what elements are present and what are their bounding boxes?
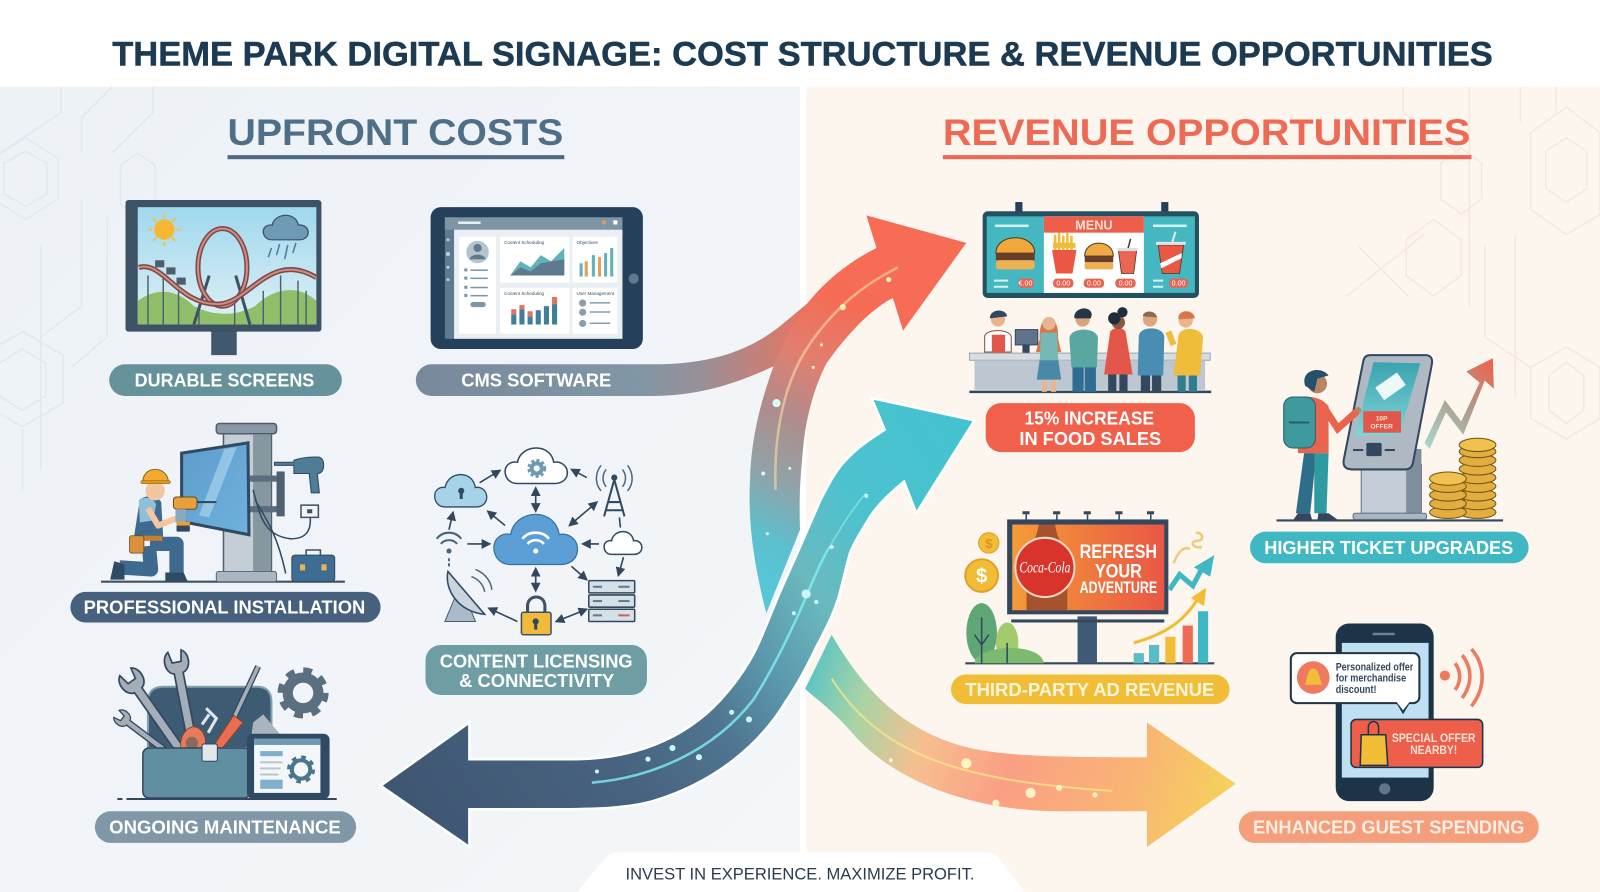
- label: professional installation: PROFESSIONAL INSTALLATION: [84, 596, 365, 617]
- card: content licensing and connectivity: [426, 448, 647, 695]
- icon: phone with personalized offer notifications: SPECIAL OFFER: [1392, 732, 1476, 745]
- icon: phone with personalized offer notifications: for merchandise: [1336, 673, 1406, 685]
- icon: roadside billboard with ad and rising bars: $: [985, 536, 993, 551]
- icon: digital menu board: 0.00: [1119, 280, 1132, 288]
- card: third-party ad revenue: [951, 511, 1230, 704]
- label: 15% increase in food sales: 15% INCREASE: [1024, 408, 1154, 429]
- footer tab: tagline: [577, 852, 1026, 892]
- footer tab: tagline: INVEST IN EXPERIENCE. MAXIMIZE PROFIT.: [626, 866, 974, 884]
- icon: digital menu board: 0.00: [1056, 280, 1070, 288]
- label: 15% increase in food sales: [986, 403, 1195, 452]
- label: content licensing and connectivity: CONTENT LICENSING: [440, 650, 633, 671]
- icon: cloud connectivity network: [435, 448, 642, 635]
- icon: roadside billboard with ad and rising bars: ADVENTURE: [1080, 579, 1157, 597]
- card: ongoing maintenance: [95, 649, 356, 843]
- icon: guest at ticket kiosk with coins and growth arrow: 10P: [1376, 415, 1388, 422]
- card: professional installation: [70, 423, 381, 622]
- heading: revenue opportunities: REVENUE OPPORTUNITIES: [943, 112, 1470, 153]
- icon: CMS dashboard tablet: User Management: [577, 291, 615, 296]
- icon: roadside billboard with ad and rising bars: $: [976, 566, 988, 588]
- icon: digital menu board: [983, 202, 1199, 298]
- card: CMS software: [431, 207, 643, 391]
- icon: guest at ticket kiosk with coins and growth arrow: [1277, 355, 1503, 520]
- label: content licensing and connectivity: [426, 645, 647, 695]
- arrow: orange flow to guest spending: [805, 635, 1236, 847]
- label: ongoing maintenance: [95, 811, 356, 843]
- title: THEME PARK DIGITAL SIGNAGE: COST STRUCTURE & REVENUE OPPORTUNITIES: [112, 35, 1493, 73]
- heading: upfront costs: UPFRONT COSTS: [228, 112, 563, 153]
- icon: phone with personalized offer notifications: discount!: [1336, 684, 1377, 696]
- icon: guests queuing at counter: [969, 307, 1211, 392]
- label: CMS software: CMS SOFTWARE: [461, 370, 611, 391]
- label: enhanced guest spending: ENHANCED GUEST SPENDING: [1253, 817, 1524, 838]
- label: professional installation: [70, 592, 381, 622]
- icon: digital menu board: MENU: [1075, 218, 1113, 233]
- icon: guest at ticket kiosk with coins and growth arrow: OFFER: [1370, 424, 1393, 431]
- icon: roadside billboard with ad and rising bars: REFRESH: [1080, 541, 1157, 563]
- icon: digital menu board: 0.00: [1087, 280, 1101, 288]
- label: content licensing and connectivity: & CONNECTIVITY: [459, 670, 614, 691]
- label: 15% increase in food sales: IN FOOD SALES: [1019, 428, 1161, 449]
- icon: CMS dashboard tablet: [431, 207, 643, 349]
- card: enhanced guest spending: [1239, 624, 1539, 843]
- panel: revenue opportunities background: [806, 87, 1600, 892]
- icon: technician installing screen on pole: [101, 423, 345, 582]
- arrow: curved flow to food revenue: [750, 215, 966, 613]
- icon: outdoor screen with roller coaster: [126, 200, 321, 355]
- icon: roadside billboard with ad and rising bars: [965, 511, 1214, 663]
- label: higher ticket upgrades: [1250, 532, 1529, 563]
- icon: CMS dashboard tablet: Content Scheduling: [504, 291, 544, 296]
- header band: [0, 0, 1600, 87]
- label: ongoing maintenance: ONGOING MAINTENANCE: [109, 817, 341, 838]
- icon: digital menu board: 0.00: [1172, 280, 1186, 288]
- arrow: CMS cost branch feeding red arrow: [416, 296, 816, 396]
- icon: digital menu board: €.00: [1019, 280, 1032, 288]
- icon: phone with personalized offer notifications: [1291, 624, 1483, 801]
- label: durable screens: [109, 364, 342, 396]
- icon: phone with personalized offer notifications: Personalized offer: [1336, 661, 1413, 673]
- icon: roadside billboard with ad and rising bars: YOUR: [1095, 561, 1142, 583]
- card: durable screens: [109, 200, 342, 396]
- label: durable screens: DURABLE SCREENS: [135, 370, 314, 391]
- card: higher ticket upgrades: [1250, 355, 1529, 563]
- card: food sales: [969, 202, 1211, 452]
- icon: CMS dashboard tablet: Content Scheduling: [504, 240, 544, 245]
- icon: toolbox, gear and diagnostic tablet: [112, 649, 337, 799]
- label: higher ticket upgrades: HIGHER TICKET UPGRADES: [1264, 537, 1513, 558]
- label: third-party ad revenue: [951, 675, 1230, 704]
- label: third-party ad revenue: THIRD-PARTY AD REVENUE: [965, 679, 1214, 700]
- label: enhanced guest spending: [1239, 811, 1539, 843]
- arrow: two-way teal to navy flow: [381, 398, 974, 847]
- icon: CMS dashboard tablet: Objectives: [577, 240, 599, 245]
- icon: roadside billboard with ad and rising bars: Coca-Cola: [1019, 559, 1071, 576]
- panel: upfront costs background: [0, 87, 800, 892]
- icon: phone with personalized offer notifications: NEARBY!: [1410, 744, 1457, 757]
